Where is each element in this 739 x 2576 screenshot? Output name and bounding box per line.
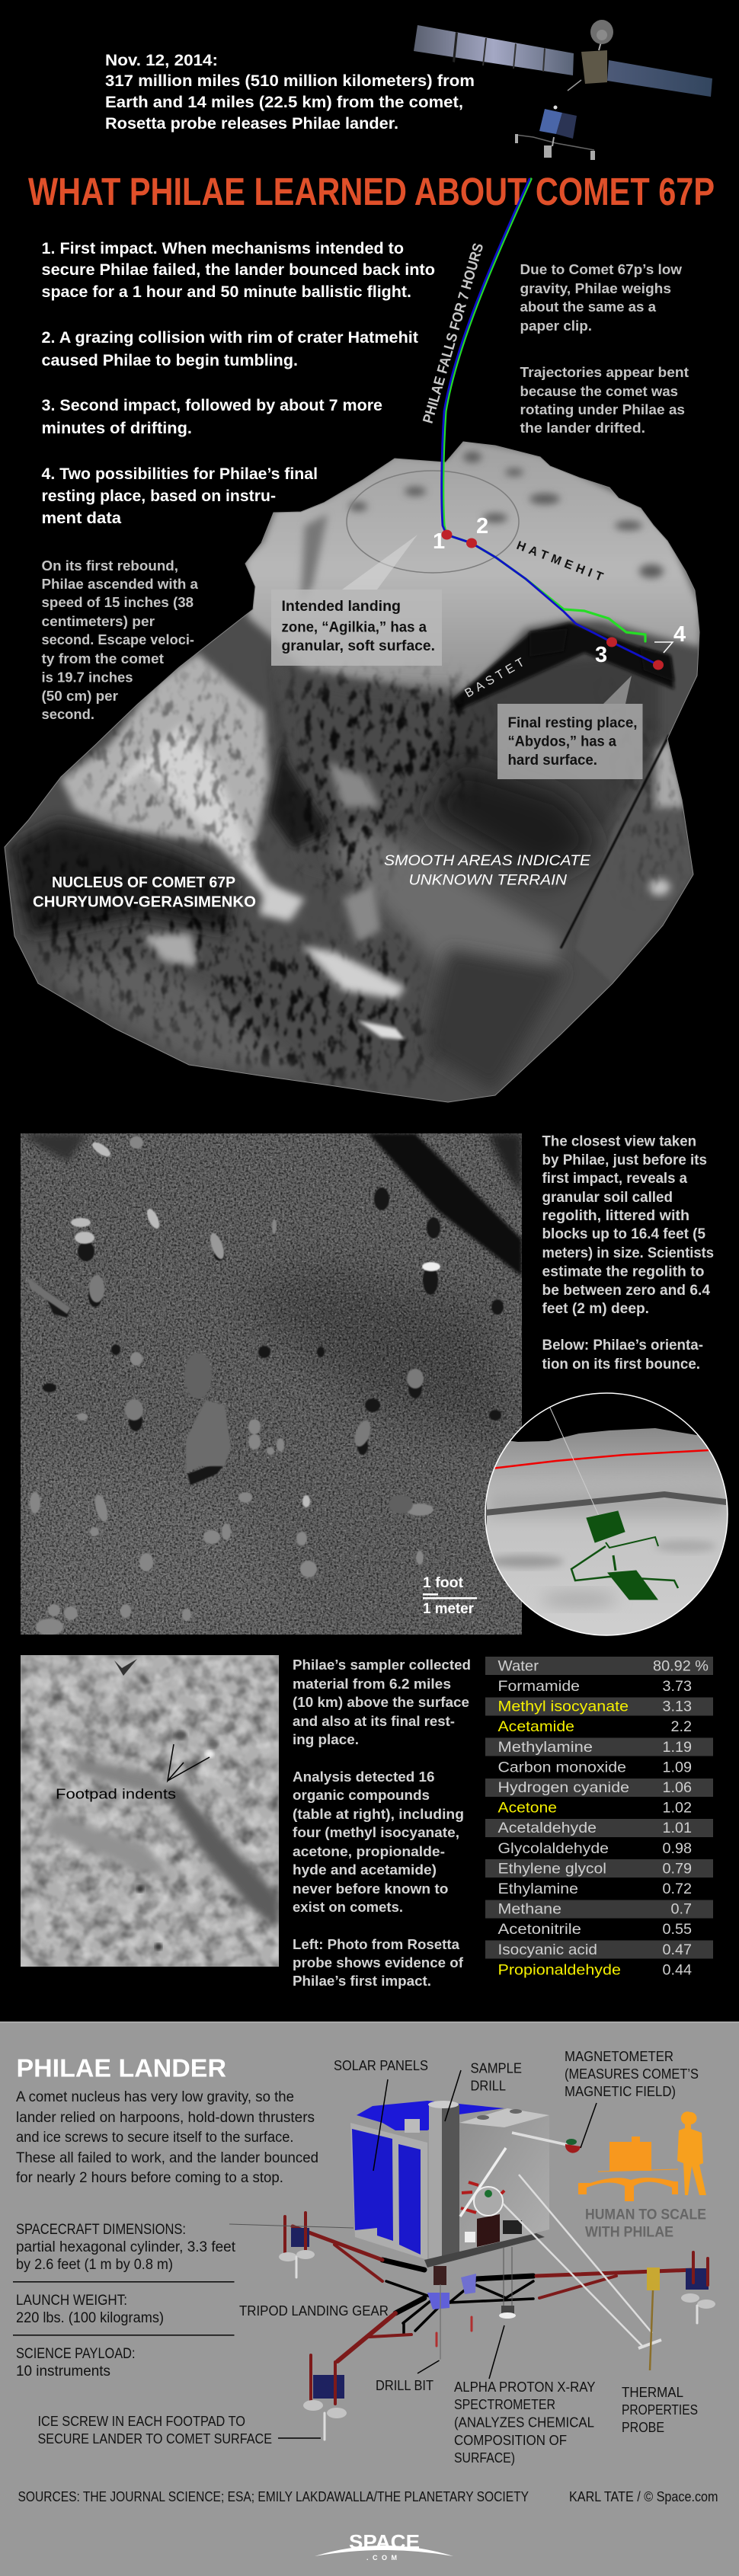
icon: Rosetta spacecraft xyxy=(414,20,712,97)
text: lander intro: and ice screws to secure itself to the surface. xyxy=(16,2130,294,2146)
table: organic compounds: Acetonitrile xyxy=(498,1921,581,1938)
marker: impact points: 4 xyxy=(673,622,686,647)
marker: impact points xyxy=(433,514,686,670)
labels: lander parts: TRIPOD LANDING GEAR xyxy=(239,2303,389,2319)
table: organic compounds xyxy=(485,1657,713,1979)
diagram: lander body xyxy=(350,2101,549,2268)
label: Philae falls for 7 hours: PHILAE FALLS FOR 7 HOURS xyxy=(421,241,487,425)
label: nucleus of comet: NUCLEUS OF COMET 67P xyxy=(52,874,235,891)
text: sampler findings: four (methyl isocyanate, xyxy=(293,1824,459,1840)
text: sampler findings: Philae’s sampler collected xyxy=(293,1657,471,1673)
smooth central band xyxy=(329,820,564,970)
table: organic compounds: Glycolaldehyde xyxy=(498,1840,609,1857)
bright left lobe xyxy=(58,650,277,888)
text: sampler findings: ing place. xyxy=(293,1731,359,1747)
labels: lander parts xyxy=(38,2048,699,2466)
table: organic compounds: 1.19 xyxy=(663,1739,692,1756)
inset: Philae orientation xyxy=(485,1393,728,1635)
text: release facts: Earth and 14 miles (22.5 km) from the comet, xyxy=(105,94,463,111)
table: organic compounds: 0.55 xyxy=(663,1921,692,1938)
labels: lander parts: MAGNETOMETER xyxy=(565,2048,673,2064)
table: organic compounds: 0.98 xyxy=(663,1840,692,1857)
text: sampler findings: acetone, propionalde- xyxy=(293,1843,445,1859)
text: lander specs: by 2.6 feet (1 m by 0.8 m) xyxy=(16,2257,173,2273)
text: low gravity and trajectories notes: rotating under Philae as xyxy=(520,402,685,417)
front foot xyxy=(303,2355,347,2440)
head shading patches xyxy=(301,452,664,602)
table: organic compounds: Carbon monoxide xyxy=(498,1759,626,1776)
text: low gravity and trajectories notes xyxy=(520,262,689,436)
text: sampler findings: Philae’s first impact. xyxy=(293,1973,431,1989)
labels: lander parts: THERMAL xyxy=(622,2384,683,2400)
lower centre shadow bands xyxy=(424,949,566,1092)
text: lander intro: for nearly 2 hours before coming to a stop. xyxy=(16,2170,283,2186)
text: lander specs: 10 instruments xyxy=(16,2363,110,2379)
text: numbered impact list: ment data xyxy=(41,510,121,527)
callout: final resting place: Final resting place, xyxy=(507,715,637,731)
label: smooth areas note: UNKNOWN TERRAIN xyxy=(408,873,567,888)
table: organic compounds: 80.92 % xyxy=(653,1657,709,1674)
labels: lander parts: (MEASURES COMET’S xyxy=(565,2066,699,2082)
text: rebound speeds: On its first rebound, xyxy=(41,558,178,574)
callout: intended landing zone: Intended landing xyxy=(282,599,401,615)
callout: final resting place xyxy=(497,676,643,779)
text: numbered impact list: space for a 1 hour and 50 minute ballistic flight. xyxy=(41,283,411,301)
marker: impact points: 2 xyxy=(476,514,488,539)
text: rebound speeds: second. Escape veloci- xyxy=(41,632,194,647)
lower-left dark band xyxy=(9,820,235,936)
text: numbered impact list: minutes of drifting. xyxy=(41,420,192,437)
mottled dark texture xyxy=(21,666,684,1090)
table: organic compounds: Water xyxy=(498,1657,539,1674)
text: low gravity and trajectories notes: Trajectories appear bent xyxy=(520,365,689,380)
regolith grain xyxy=(21,1133,522,1635)
text: sampler findings: material from 6.2 miles xyxy=(293,1676,451,1692)
right lobe xyxy=(577,774,691,980)
table: organic compounds: 0.7 xyxy=(670,1901,692,1918)
text: sampler findings: (10 km) above the surface xyxy=(293,1694,469,1710)
green lander model xyxy=(571,1511,678,1600)
table: organic compounds: 3.13 xyxy=(663,1699,692,1715)
text: low gravity and trajectories notes: about the same as a xyxy=(520,299,657,315)
labels: lander parts: MAGNETIC FIELD) xyxy=(565,2083,676,2099)
text: rebound speeds: is 19.7 inches xyxy=(41,670,133,686)
logo: Space.com xyxy=(315,2530,453,2562)
text: lander intro: These all failed to work, and the lander bounced xyxy=(16,2150,318,2166)
table: organic compounds: Methane xyxy=(498,1901,561,1918)
text: low gravity and trajectories notes: because the comet was xyxy=(520,384,678,399)
text: closest view: feet (2 m) deep. xyxy=(542,1301,649,1317)
text: lander specs: 220 lbs. (100 kilograms) xyxy=(16,2310,164,2326)
diagram: tripod landing gear xyxy=(279,2213,715,2440)
text: closest view: blocks up to 16.4 feet (5 xyxy=(542,1226,705,1242)
table: organic compounds: Ethylamine xyxy=(498,1881,578,1897)
marker: impact points: 3 xyxy=(595,643,607,667)
text: closest view: Below: Philae’s orienta- xyxy=(542,1338,703,1354)
text: rebound speeds: second. xyxy=(41,707,94,722)
diagram: human to scale xyxy=(578,2111,706,2201)
text: sources and credit: KARL TATE / © Space.com xyxy=(569,2488,718,2504)
labels: lander parts: (ANALYZES CHEMICAL xyxy=(454,2415,594,2430)
icon: Philae lander in flight xyxy=(515,105,595,160)
table: organic compounds: Hydrogen cyanide xyxy=(498,1779,629,1796)
text: numbered impact list: 1. First impact. When mechanisms intended to xyxy=(41,240,404,257)
table: organic compounds: Propionaldehyde xyxy=(498,1962,621,1979)
text: closest view xyxy=(542,1133,714,1373)
text: closest view: regolith, littered with xyxy=(542,1208,689,1224)
table: organic compounds: Acetone xyxy=(498,1799,557,1816)
rocks xyxy=(26,1136,440,1635)
text: rebound speeds xyxy=(41,558,199,722)
solar panels xyxy=(352,2129,393,2241)
intended landing ellipse xyxy=(347,471,519,573)
labels: lander parts: DRILL xyxy=(471,2078,506,2093)
lower-left smooth floor xyxy=(56,954,293,1072)
text: rebound speeds: ty from the comet xyxy=(41,651,164,666)
text: release facts xyxy=(105,52,475,133)
labels: lander parts: SECURE LANDER TO COMET SURFACE xyxy=(38,2431,272,2447)
label: Hatmehit: HATMEHIT xyxy=(515,539,605,584)
neck mottled shadow xyxy=(303,667,465,708)
text: closest view: by Philae, just before its xyxy=(542,1152,707,1168)
comet nucleus xyxy=(0,434,709,1112)
table: organic compounds: Acetamide xyxy=(498,1718,574,1735)
callout: final resting place: “Abydos,” has a xyxy=(507,734,616,749)
marker: impact points: 1 xyxy=(433,529,445,554)
label: nucleus of comet: CHURYUMOV-GERASIMENKO xyxy=(33,894,256,911)
text: numbered impact list: caused Philae to begin tumbling. xyxy=(41,352,298,369)
labels: lander parts: SOLAR PANELS xyxy=(334,2057,428,2073)
table: organic compounds: Formamide xyxy=(498,1678,580,1695)
text: numbered impact list: 2. A grazing collision with rim of crater Hatmehit xyxy=(41,329,418,347)
labels: lander parts: COMPOSITION OF xyxy=(454,2432,567,2448)
label: human to scale: HUMAN TO SCALE xyxy=(585,2207,706,2223)
table: organic compounds: 0.44 xyxy=(663,1962,692,1979)
callout: intended landing zone: granular, soft surface. xyxy=(282,638,435,654)
panel: Philae lander xyxy=(0,2021,739,2576)
right foot xyxy=(681,2252,715,2323)
rock shadows xyxy=(42,1187,504,1485)
label: Bastet: BASTET xyxy=(463,656,527,700)
labels: lander parts: PROPERTIES xyxy=(622,2402,698,2418)
photo: regolith close-up xyxy=(21,1133,522,1635)
lander struts xyxy=(368,1133,522,1277)
text: sampler findings: organic compounds xyxy=(293,1787,430,1803)
text: closest view: estimate the regolith to xyxy=(542,1264,704,1280)
comet head bright surface xyxy=(244,438,701,705)
scale bar: 1 foot xyxy=(423,1575,464,1591)
table: organic compounds: 1.01 xyxy=(663,1820,692,1836)
scale bar xyxy=(423,1575,477,1617)
sample drill column xyxy=(429,2105,442,2258)
diagram: thermal probe xyxy=(503,2175,661,2370)
text: sampler findings: Analysis detected 16 xyxy=(293,1769,434,1785)
logo: Space.com: .COM xyxy=(366,2554,397,2562)
text: lander specs xyxy=(13,2222,236,2379)
text: numbered impact list: 3. Second impact, followed by about 7 more xyxy=(41,397,382,414)
label: human to scale xyxy=(585,2207,706,2241)
text: release facts: Rosetta probe releases Philae lander. xyxy=(105,115,398,133)
table: organic compounds: 1.02 xyxy=(663,1799,692,1816)
text: numbered impact list: resting place, based on instru- xyxy=(41,487,276,505)
arrow: descent trajectory xyxy=(442,179,658,665)
table: organic compounds: 0.72 xyxy=(663,1881,692,1897)
text: closest view: first impact, reveals a xyxy=(542,1171,687,1187)
text: low gravity and trajectories notes: the lander drifted. xyxy=(520,420,645,436)
text: sampler findings: probe shows evidence of xyxy=(293,1954,464,1970)
left foot xyxy=(279,2213,315,2277)
text: rebound speeds: speed of 15 inches (38 xyxy=(41,595,194,610)
comet outline xyxy=(5,442,699,1102)
table: organic compounds: 0.79 xyxy=(663,1860,692,1877)
text: low gravity and trajectories notes: Due to Comet 67p’s low xyxy=(520,262,683,277)
text: lander intro: lander relied on harpoons, hold-down thrusters xyxy=(16,2110,315,2126)
text: sampler findings: exist on comets. xyxy=(293,1899,403,1915)
table: organic compounds: Methyl isocyanate xyxy=(498,1699,629,1715)
leader lines xyxy=(229,2070,597,2438)
text: rebound speeds: Philae ascended with a xyxy=(41,577,199,592)
solar panel top xyxy=(357,2101,504,2130)
text: release facts: Nov. 12, 2014: xyxy=(105,52,218,69)
dark smooth wedge xyxy=(424,654,660,827)
text: numbered impact list: 4. Two possibilities for Philae’s final xyxy=(41,465,318,483)
logo: Space.com: SPACE xyxy=(349,2530,420,2553)
text: lander specs: SPACECRAFT DIMENSIONS: xyxy=(16,2222,186,2238)
Bastet and Abydos dark strip xyxy=(451,622,674,711)
text: sampler findings xyxy=(293,1657,471,1989)
Bastet black patches xyxy=(528,629,549,637)
text: closest view: tion on its first bounce. xyxy=(542,1357,700,1373)
labels: lander parts: ALPHA PROTON X-RAY xyxy=(454,2379,596,2395)
text: low gravity and trajectories notes: paper clip. xyxy=(520,318,592,334)
text: numbered impact list xyxy=(41,240,435,527)
text: release facts: 317 million miles (510 million kilometers) from xyxy=(105,72,475,90)
label: nucleus of comet xyxy=(33,874,256,911)
labels: lander parts: SAMPLE xyxy=(471,2060,522,2076)
label: footpad indents with pointers: Footpad indents xyxy=(56,1787,176,1802)
text: rebound speeds: (50 cm) per xyxy=(41,689,118,704)
label: smooth areas note: SMOOTH AREAS INDICATE xyxy=(384,853,590,869)
text: closest view: meters) in size. Scientists xyxy=(542,1245,714,1261)
text: lander specs: SCIENCE PAYLOAD: xyxy=(16,2346,136,2362)
table: organic compounds: Ethylene glycol xyxy=(498,1860,606,1877)
table: organic compounds: 1.09 xyxy=(663,1759,692,1776)
black truss xyxy=(382,2260,533,2335)
heading: Philae lander: PHILAE LANDER xyxy=(17,2053,226,2082)
labels: lander parts: SPECTROMETER xyxy=(454,2396,555,2412)
labels: lander parts: SURFACE) xyxy=(454,2450,515,2466)
photo: footpad indents xyxy=(21,1655,279,1967)
scale bar: 1 meter xyxy=(423,1601,475,1617)
text: closest view: granular soil called xyxy=(542,1190,673,1206)
text: sources and credit: SOURCES: THE JOURNAL SCIENCE; ESA; EMILY LAKDAWALLA/THE PLANETARY SOCIETY xyxy=(18,2488,529,2504)
text: closest view: The closest view taken xyxy=(542,1133,696,1150)
label: smooth areas note xyxy=(384,853,590,888)
text: low gravity and trajectories notes: gravity, Philae weighs xyxy=(520,281,671,296)
lower bright patches xyxy=(302,946,405,999)
text: lander specs: LAUNCH WEIGHT: xyxy=(16,2293,127,2309)
table: organic compounds: Methylamine xyxy=(498,1739,593,1756)
text: sampler findings: (table at right), including xyxy=(293,1806,464,1822)
text: sampler findings: hyde and acetamide) xyxy=(293,1862,437,1878)
table: organic compounds: 3.73 xyxy=(663,1678,692,1695)
callout: intended landing zone xyxy=(271,535,442,666)
labels: lander parts: ICE SCREW IN EACH FOOTPAD TO xyxy=(38,2413,245,2429)
text: lander specs: partial hexagonal cylinder, 3.3 feet xyxy=(16,2239,236,2255)
text: lander intro: A comet nucleus has very low gravity, so the xyxy=(16,2089,294,2105)
labels: lander parts: DRILL BIT xyxy=(376,2377,433,2393)
table: organic compounds: 2.2 xyxy=(670,1718,692,1735)
red legs xyxy=(293,2226,693,2361)
text: closest view: be between zero and 6.4 xyxy=(542,1283,710,1299)
callout: final resting place: hard surface. xyxy=(507,753,597,769)
red markers xyxy=(436,2333,437,2346)
diagram: APX instrument xyxy=(499,2247,516,2319)
table: organic compounds: 1.06 xyxy=(663,1779,692,1796)
text: sampler findings: and also at its final rest- xyxy=(293,1713,455,1729)
labels: lander parts: PROBE xyxy=(622,2419,664,2435)
text: sampler findings: Left: Photo from Rosetta xyxy=(293,1936,460,1952)
diagram: magnetometer boom and wheel xyxy=(460,2133,581,2216)
central mount xyxy=(433,2266,446,2285)
callout: intended landing zone: zone, “Agilkia,” has a xyxy=(282,620,427,635)
neck dark crease xyxy=(265,727,332,850)
label: footpad indents with pointers xyxy=(56,1744,210,1802)
text: sampler findings: never before known to xyxy=(293,1881,448,1897)
label: human to scale: WITH PHILAE xyxy=(585,2224,673,2241)
text: rebound speeds: centimeters) per xyxy=(41,614,155,629)
table: organic compounds: 0.47 xyxy=(663,1942,692,1958)
text: numbered impact list: secure Philae failed, the lander bounced back into xyxy=(41,261,435,279)
text: lander intro xyxy=(16,2089,318,2186)
table: organic compounds: Isocyanic acid xyxy=(498,1942,597,1958)
table: organic compounds: Acetaldehyde xyxy=(498,1820,597,1836)
